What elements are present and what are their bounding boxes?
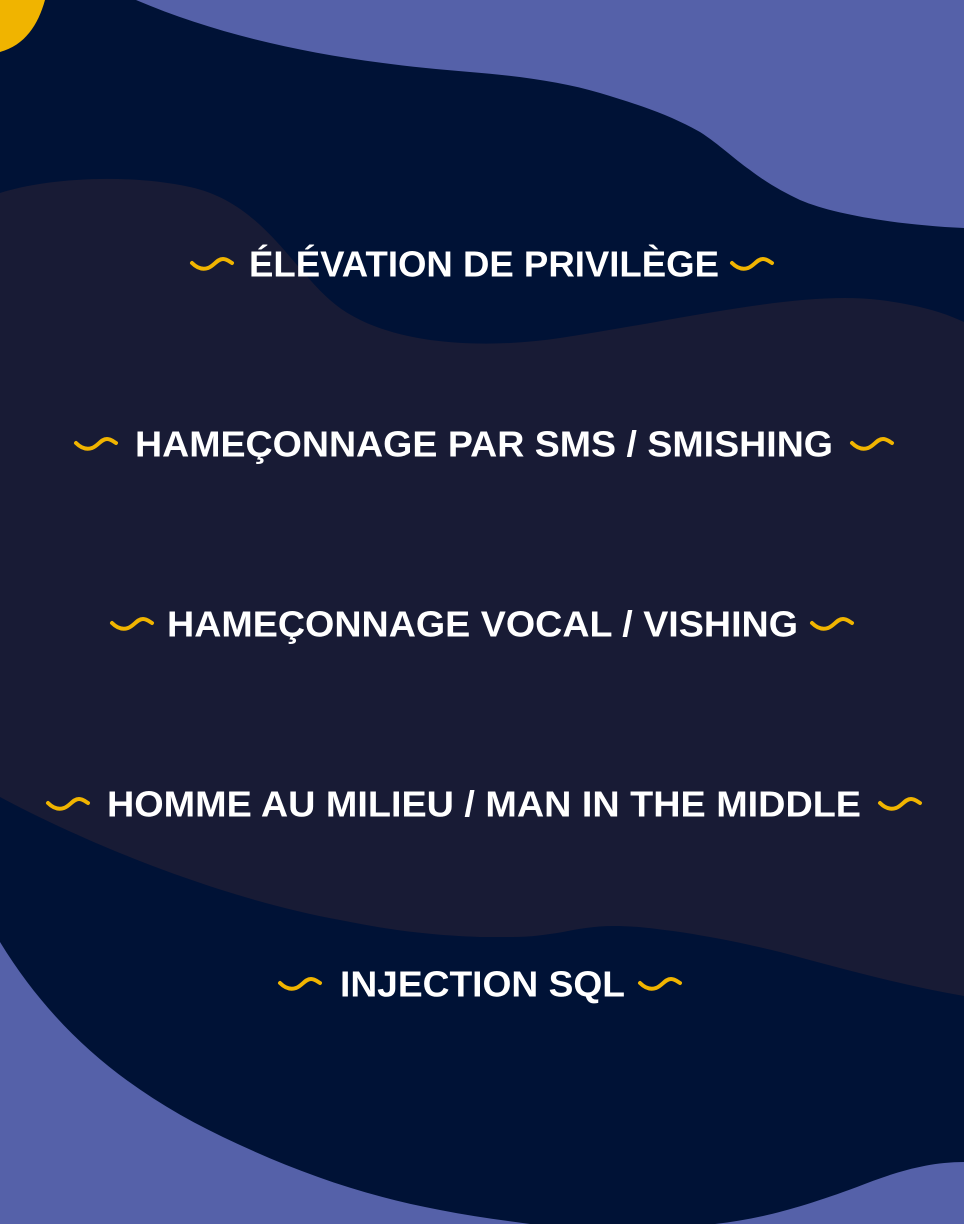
yellow corner shape: [0, 0, 45, 52]
item: homme au milieu: HOMME AU MILIEU / MAN IN THE MIDDLE: [107, 784, 861, 824]
item: hameçonnage vocal: HAMEÇONNAGE VOCAL / VISHING: [167, 604, 798, 644]
item: hameçonnage par sms: HAMEÇONNAGE PAR SMS / SMISHING: [135, 424, 833, 464]
top-right periwinkle shape: [136, 0, 964, 228]
dark wave band: [0, 179, 964, 996]
item: élévation de privilège: ÉLÉVATION DE PRIVILÈGE: [249, 244, 719, 284]
bottom periwinkle shape: [0, 942, 964, 1224]
item: injection sql: [280, 964, 680, 1004]
item: injection sql: INJECTION SQL: [340, 964, 625, 1004]
